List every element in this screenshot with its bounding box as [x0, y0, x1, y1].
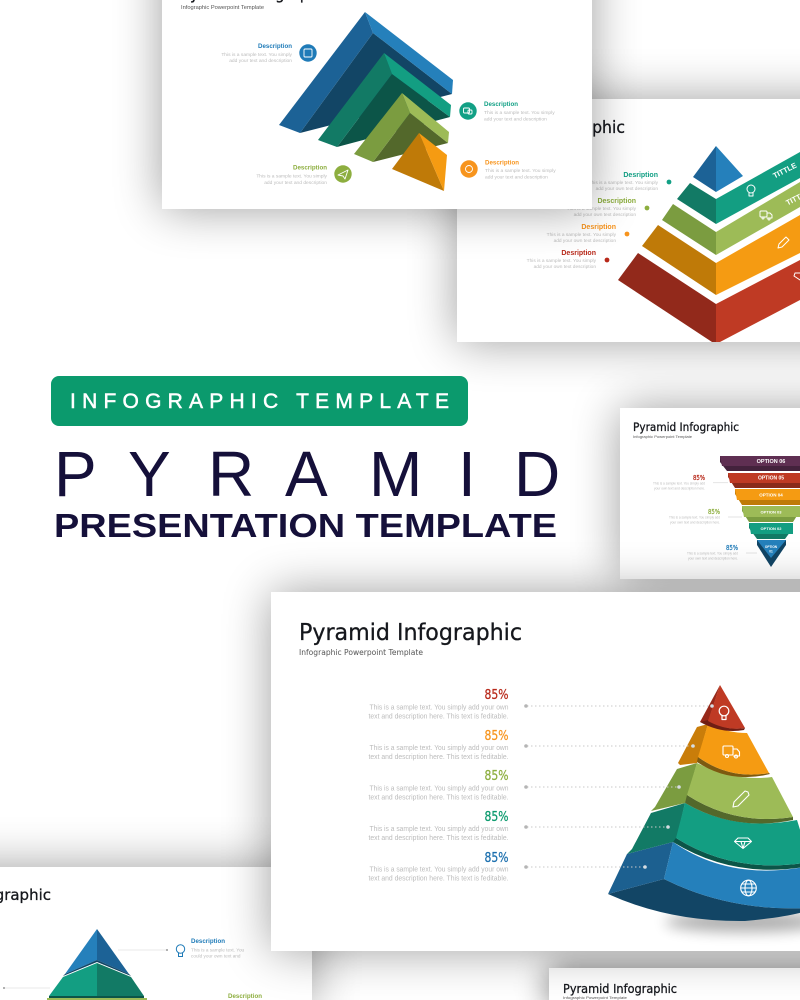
callout: blue description	[221, 43, 293, 64]
list item: red 85%	[368, 688, 509, 720]
callout: olive description	[567, 198, 649, 218]
icon: orange badge	[460, 160, 478, 178]
heading badge	[51, 376, 468, 426]
callout: blue percent: your own text and description here.	[688, 556, 738, 560]
callout: red percent: your own text and description here.	[654, 486, 705, 490]
callout: olive description: Description	[597, 198, 636, 205]
segmented cone pyramid	[608, 685, 800, 921]
callout: red description: Desription	[561, 250, 596, 257]
slide title: Pyramid Infographic	[563, 981, 677, 996]
callout: orange description: Description	[485, 160, 519, 166]
layer label: option 06: OPTION 06	[757, 459, 785, 465]
callout: red description: add your own text description	[534, 264, 596, 270]
icon: diamond	[734, 838, 752, 848]
list item: red 85%: 85%	[484, 688, 508, 703]
callout: olive percent: This is a sample text. You simply add	[669, 516, 720, 520]
icon: truck	[760, 211, 772, 220]
callout: red description	[527, 250, 609, 270]
callout: blue description: This is a sample text. You	[191, 948, 245, 952]
callout: blue description: could your own text and	[191, 954, 241, 958]
slide: tilted 3D pyramid	[162, 0, 592, 209]
slide: bottom right title	[549, 968, 800, 1000]
callout: orange description: This is a sample text. You simply	[547, 232, 617, 238]
callout: olive description: add your text and description	[264, 180, 327, 186]
slide subtitle: Infographic Powerpoint Template	[563, 996, 627, 1000]
list item: olive 85%: text and description here. This text is feditable.	[368, 794, 509, 802]
icon: bulb	[747, 185, 755, 196]
callout: red percent: 85%	[693, 474, 705, 482]
list item: orange 85%	[368, 729, 509, 761]
layered pyramid	[618, 146, 800, 342]
callout: red percent	[653, 474, 728, 490]
callout: orange description: This is a sample text. You simply	[485, 168, 556, 174]
callout: blue description	[191, 938, 245, 958]
slide subtitle: Infographic Powerpoint Template	[299, 648, 423, 657]
callout: teal description: add your text and description	[484, 116, 547, 122]
pyramid shadow	[665, 912, 800, 932]
callout: teal description: Desription	[623, 172, 658, 179]
icon: teal badge	[459, 102, 477, 120]
callout: red percent: This is a sample text. You simply add	[653, 482, 705, 486]
slide title: Pyramid Infographic	[633, 420, 739, 434]
heading badge: INFOGRAPHIC TEMPLATE	[70, 390, 449, 413]
callout: blue description: add your text and description	[229, 58, 292, 64]
slide: main pyramid infographic	[271, 592, 800, 951]
layer label: option 05: OPTION 05	[758, 476, 784, 482]
callout: olive percent: 85%	[708, 508, 720, 516]
icon: blue badge	[299, 44, 317, 62]
connector lines	[3, 949, 168, 989]
callout: olive description: This is a sample text. You simply	[567, 206, 637, 212]
callout: blue description: Description	[191, 938, 225, 945]
callout: teal description	[484, 101, 555, 122]
icon: pencil	[733, 791, 749, 807]
icon: diamond	[794, 273, 800, 280]
list item: blue 85%: 85%	[484, 851, 508, 866]
stacked pyramid	[47, 929, 147, 1000]
callout: orange description	[547, 224, 629, 244]
layer label: option 01: 01	[769, 550, 773, 554]
icon: pencil	[778, 237, 789, 248]
callout: olive description: This is a sample text. You simply	[256, 174, 328, 180]
icon: olive badge	[334, 165, 352, 183]
list item: blue 85%: This is a sample text. You simply add your own	[370, 866, 509, 874]
slide: bottom left pyramid	[0, 867, 312, 1000]
slide subtitle: Infographic Powerpoint Template	[181, 5, 264, 11]
layer label: option 03: OPTION 03	[761, 510, 782, 514]
callout: olive description: Description	[228, 993, 262, 1000]
list item: orange 85%: This is a sample text. You simply add your own	[370, 745, 509, 752]
list item: teal 85%: 85%	[484, 810, 508, 825]
callout: olive percent	[669, 508, 742, 524]
callout: blue percent	[687, 544, 757, 560]
list item: orange 85%: 85%	[484, 729, 508, 744]
icon: globe	[741, 880, 756, 896]
main subtitle: PRESENTATION TEMPLATE	[54, 507, 557, 544]
list item: red 85%: text and description here. This text is feditable.	[368, 714, 509, 720]
callout: orange description	[485, 160, 556, 180]
callout: olive description: Description	[293, 164, 327, 172]
list item: teal 85%	[368, 810, 509, 842]
list item: red 85%: This is a sample text. You simply add your own	[370, 704, 509, 712]
list item: orange 85%: text and description here. This text is feditable.	[368, 754, 509, 761]
layer label: option 04: OPTION 04	[759, 492, 783, 498]
list item: teal 85%: This is a sample text. You simply add your own	[370, 826, 509, 833]
slide: inverted pyramid	[620, 408, 800, 579]
list item: blue 85%: text and description here. This text is feditable.	[368, 876, 509, 882]
main title: PYRAMID: PYRAMID	[54, 438, 560, 510]
callout: olive description	[256, 164, 328, 186]
callout: blue description: Description	[258, 43, 292, 50]
callout: teal description: add your own text description	[596, 186, 658, 192]
leader lines	[524, 704, 714, 869]
callout: orange description: add your own text description	[554, 238, 616, 244]
slide title fragment: Pyramid Infographic	[467, 118, 625, 138]
callout: teal description: Description	[484, 101, 518, 108]
callout: olive description: add your own text description	[574, 212, 636, 218]
list item: blue 85%	[368, 851, 509, 882]
callout: teal description	[589, 172, 671, 192]
layer label: option 01: OPTION	[765, 545, 777, 549]
callout: olive percent: your own text and description here.	[670, 520, 720, 524]
callout: blue description: This is a sample text. You simply	[221, 52, 293, 58]
icon: bulb	[176, 945, 185, 956]
tilted pyramid	[279, 12, 453, 191]
inverted layered pyramid	[720, 456, 800, 567]
icon: truck	[723, 746, 740, 758]
list item: olive 85%: This is a sample text. You simply add your own	[370, 786, 509, 792]
callout: orange description: Desription	[581, 224, 616, 231]
list item: teal 85%: text and description here. This text is feditable.	[368, 835, 509, 842]
callout: orange description: add your text and description	[485, 174, 548, 180]
layer label: option 02: OPTION 02	[761, 526, 782, 531]
slide: stepped pyramid with titled layers	[457, 99, 800, 342]
list item: olive 85%: 85%	[484, 769, 508, 784]
icon: bulb	[719, 706, 729, 720]
callout: blue percent: This is a sample text. You simply add	[687, 552, 738, 556]
slide title: Pyramid Infographic	[299, 620, 522, 646]
callout: blue percent: 85%	[726, 544, 738, 552]
callout: teal description: This is a sample text. You simply	[589, 180, 659, 186]
slide subtitle: Infographic Powerpoint Template	[633, 435, 692, 439]
callout: red description: This is a sample text. You simply	[527, 258, 597, 264]
layer label: TITTLE: TITTLE	[771, 161, 798, 180]
list item: olive 85%	[368, 769, 509, 802]
callout: teal description: This is a sample text. You simply	[484, 110, 555, 116]
